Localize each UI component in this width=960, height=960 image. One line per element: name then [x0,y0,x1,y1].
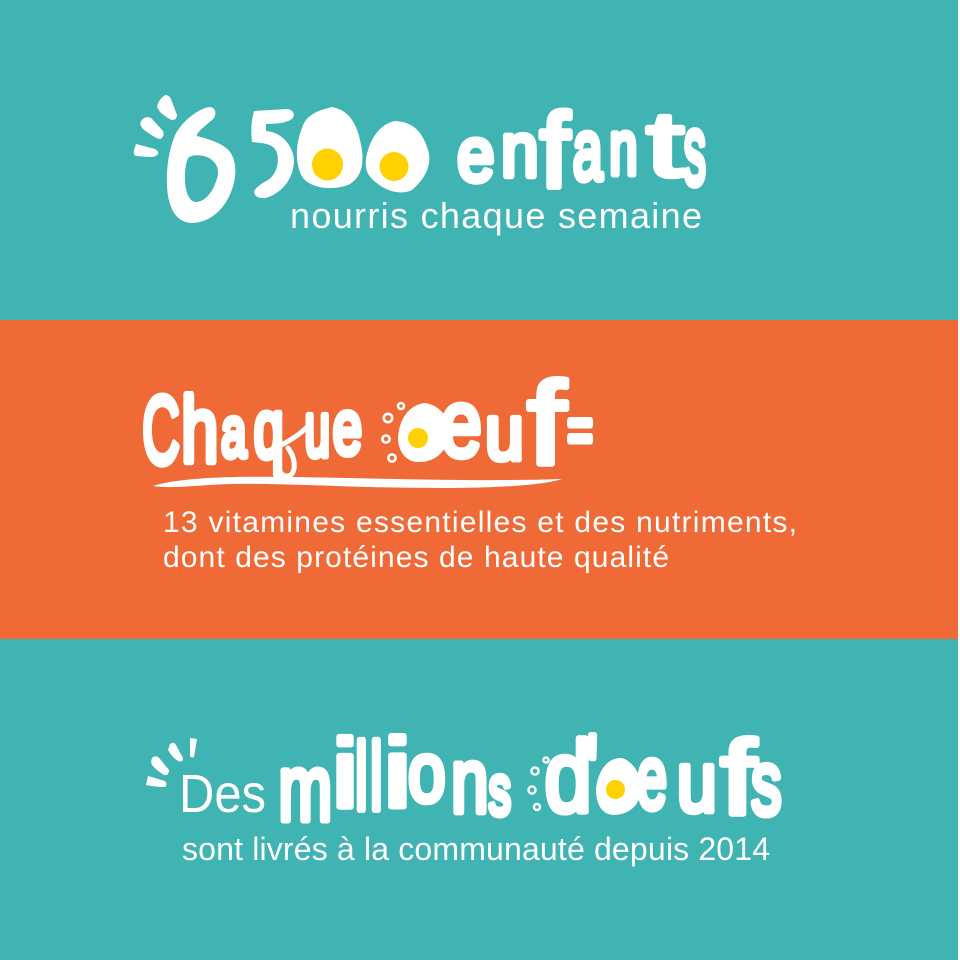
icon: egg zero [297,107,363,188]
word: millions: n [451,730,488,831]
icon: rays [146,738,197,787]
word: millions: m [278,736,332,840]
word: millions: l [370,725,382,830]
word: millions [278,718,511,840]
icon: egg [596,758,641,815]
underline swoosh [153,477,562,488]
word: millions: i [332,720,359,828]
word: Chaque: u [305,388,330,473]
text: 13 vitamines: dont des protéines de haute qualité [163,541,669,574]
word: millions: i [383,718,412,828]
text: nourris chaque semaine: nourris chaque semaine [290,195,702,236]
word: eufs: f [720,719,756,836]
heading: 6 500 enfants [134,92,706,223]
word: Chaque: h [181,379,218,483]
word: enfants: t [646,93,684,196]
heading: Chaque oeuf = [142,358,593,490]
word: Chaque: e [333,385,362,471]
word: enfants: s [684,96,706,206]
word: Des: Des [179,764,266,824]
word: millions: l [355,725,367,830]
icon: egg zero [366,121,429,192]
word: enfants: f [540,92,570,210]
panel: middle orange band [0,320,958,639]
word: eufs [637,719,781,836]
word: enfants: e [457,113,494,198]
text: sont livrés: sont livrés à la communauté depuis 2014 [182,831,770,867]
word: enfants: a [573,103,603,198]
panel: top teal band [0,0,958,320]
word: millions: s [489,751,511,830]
word: euf: = [567,395,593,466]
text: 13 vitamines [163,506,797,574]
word: euf: e [440,372,482,477]
heading: Des millions d'oeufs [146,716,781,840]
icon: bubbles [528,757,549,810]
digit 5 [251,109,294,198]
word: millions: o [408,727,445,820]
icon: bubbles [382,403,404,462]
text: 13 vitamines: 13 vitamines essentielles et des nutriments, [163,506,797,539]
word: euf [440,358,593,490]
word: Chaque [142,377,362,484]
icon: egg [398,403,449,462]
word: eufs: e [637,727,667,827]
word: enfants: n [610,106,637,191]
word: eufs: u [677,734,717,830]
word: d': d [545,720,592,833]
word: eufs: s [751,733,781,834]
word: Chaque: C [142,377,180,484]
word: euf: f [527,358,567,490]
word: enfants: n [501,108,538,193]
word: Chaque: q [254,384,284,475]
word: euf: u [485,388,524,476]
word: Chaque: a [221,392,246,472]
word: d': ' [587,716,598,827]
icon: rays [134,95,177,157]
panel: bottom teal band [0,639,958,960]
big digit 6 [167,107,235,223]
word: enfants [457,92,706,210]
